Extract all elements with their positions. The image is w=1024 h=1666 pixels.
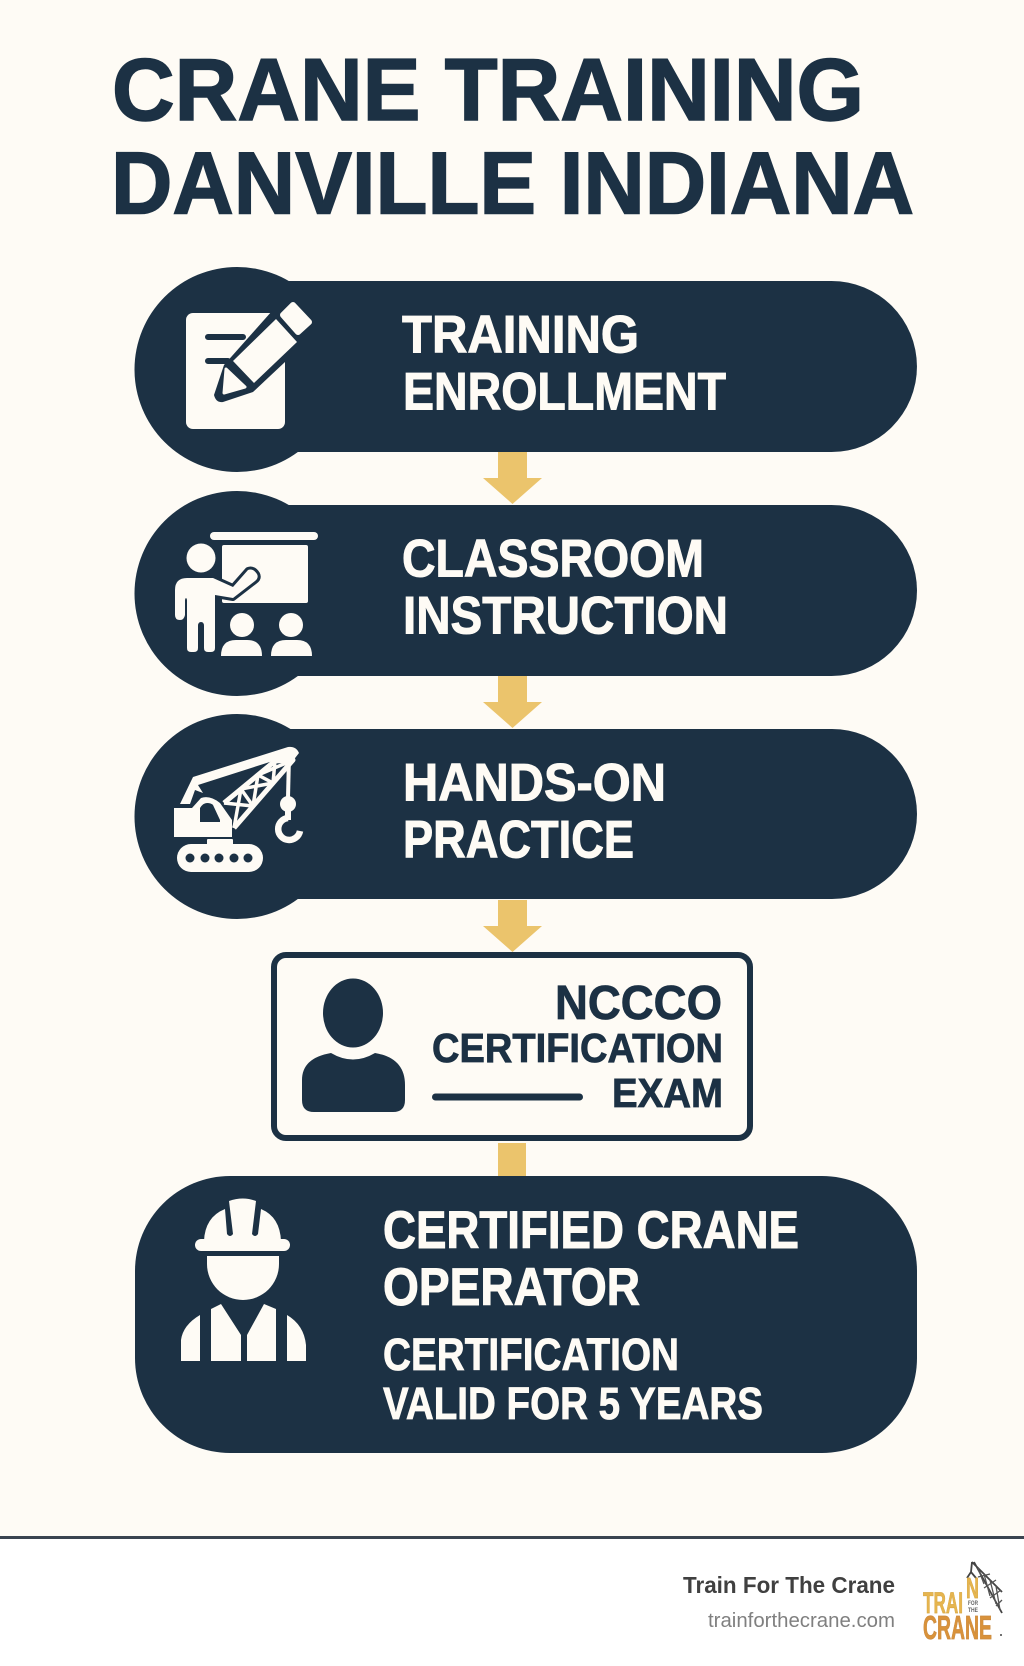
text: NCCCO certification exam: NCCCO bbox=[555, 977, 722, 1030]
footer bbox=[0, 1536, 1024, 1666]
heading: training enrollment: ENROLLMENT bbox=[403, 362, 726, 422]
logo: TRAI bbox=[923, 1587, 963, 1620]
heading: certified crane operator: OPERATOR bbox=[383, 1258, 640, 1317]
footer brand name: Train For The Crane bbox=[683, 1572, 895, 1598]
text: NCCCO certification exam: EXAM bbox=[612, 1070, 723, 1116]
heading: hands-on practice: HANDS-ON bbox=[403, 754, 666, 812]
icon: teacher and students bbox=[175, 532, 318, 656]
arrow: classroom to practice bbox=[483, 676, 542, 728]
icon: person silhouette bbox=[302, 978, 405, 1112]
logo: N bbox=[966, 1573, 979, 1605]
panel: classroom instruction bbox=[134, 491, 917, 696]
icon: construction worker bbox=[181, 1198, 306, 1361]
panel: training enrollment bbox=[134, 267, 917, 472]
heading: certified crane operator bbox=[383, 1201, 799, 1317]
text: certification validity: VALID FOR 5 YEARS bbox=[383, 1378, 763, 1429]
logo bbox=[923, 1562, 1002, 1646]
text: certification validity bbox=[383, 1329, 763, 1429]
title: CRANE TRAINING bbox=[112, 40, 864, 139]
text: certification validity: CERTIFICATION bbox=[383, 1329, 679, 1380]
title bbox=[111, 40, 914, 232]
icon: crawler crane bbox=[174, 747, 300, 872]
panel: hands-on practice bbox=[134, 714, 917, 919]
heading: certified crane operator: CERTIFIED CRANE bbox=[383, 1201, 799, 1260]
arrow: exam to certified operator bbox=[498, 1143, 526, 1177]
logo: FOR bbox=[968, 1601, 979, 1607]
title: DANVILLE INDIANA bbox=[111, 134, 914, 232]
panel: NCCCO certification exam card bbox=[274, 955, 750, 1138]
heading: classroom instruction: CLASSROOM bbox=[402, 530, 704, 588]
heading: training enrollment bbox=[402, 306, 726, 422]
arrow: practice to exam bbox=[483, 900, 542, 952]
heading: hands-on practice: PRACTICE bbox=[403, 810, 634, 870]
text: NCCCO certification exam bbox=[432, 977, 723, 1116]
text: NCCCO certification exam: CERTIFICATION bbox=[432, 1025, 723, 1071]
logo: THE bbox=[968, 1608, 978, 1614]
heading: hands-on practice bbox=[403, 754, 666, 870]
arrow: enrollment to classroom bbox=[483, 452, 542, 504]
footer url: trainforthecrane.com bbox=[708, 1610, 895, 1632]
icon: document and pencil bbox=[186, 305, 309, 429]
heading: classroom instruction bbox=[402, 530, 728, 646]
heading: training enrollment: TRAINING bbox=[402, 306, 639, 364]
panel: certified crane operator bbox=[135, 1176, 917, 1453]
heading: classroom instruction: INSTRUCTION bbox=[403, 586, 728, 646]
